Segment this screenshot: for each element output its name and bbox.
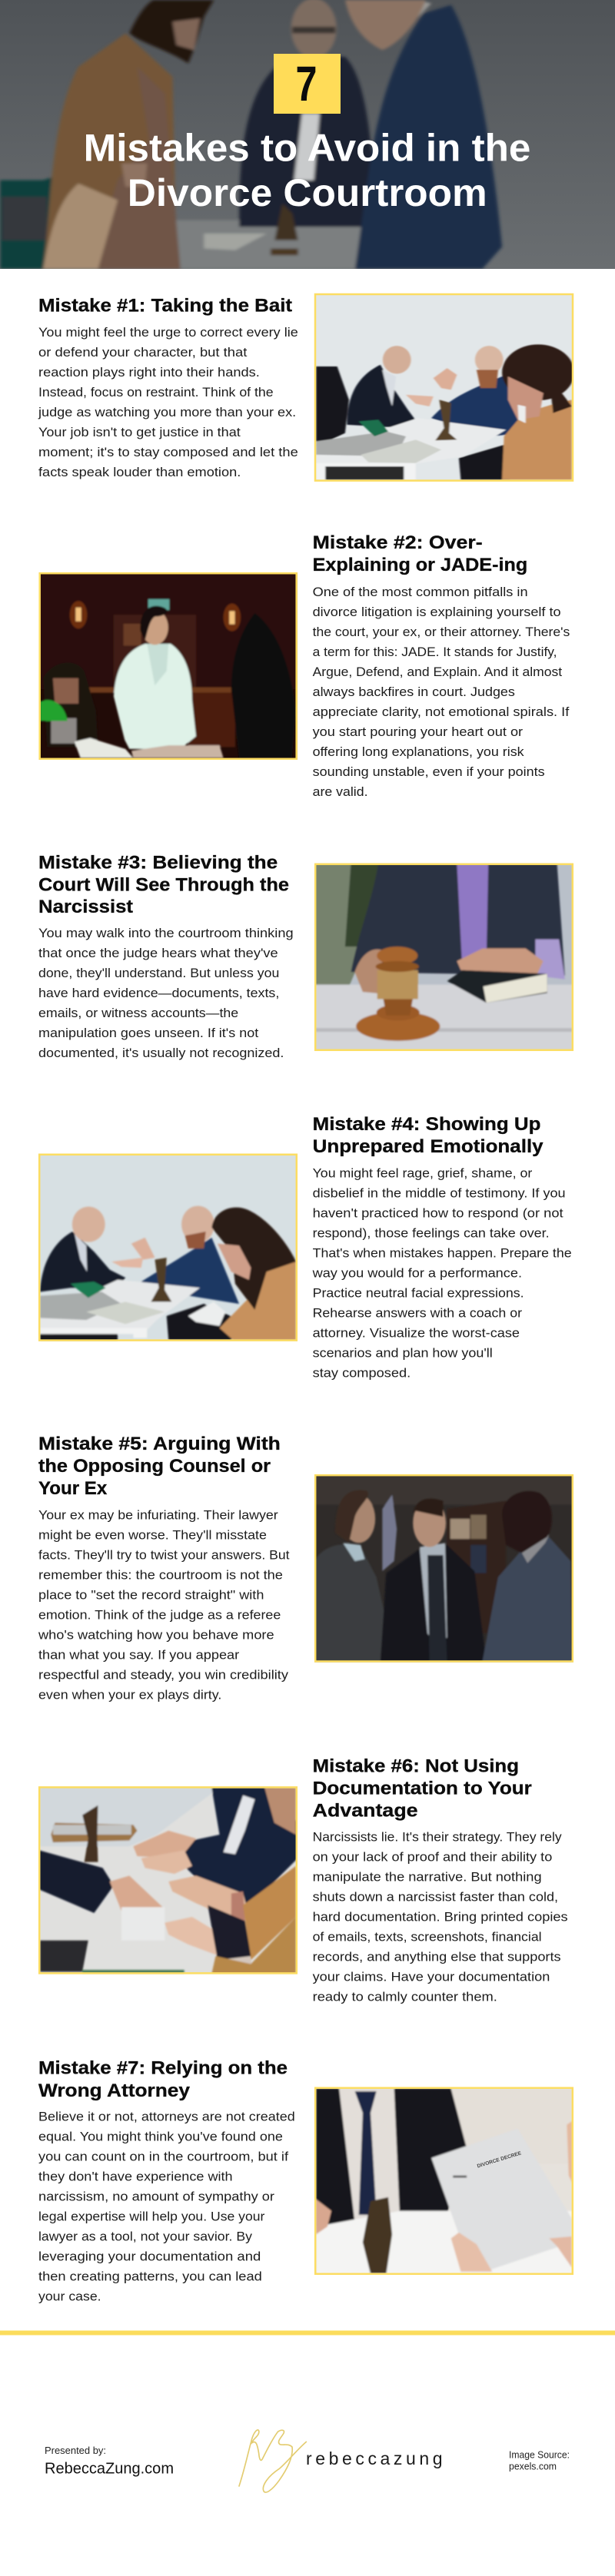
body text: then creating patterns, you can lead <box>38 2269 262 2283</box>
body text: Instead, focus on restraint. Think of the <box>38 385 274 399</box>
body text: who's watching how you behave more <box>38 1627 274 1643</box>
image source <box>509 2449 570 2472</box>
heading: Documentation to Your <box>313 1778 532 1799</box>
body text: respond), those feelings can take over. <box>313 1225 550 1240</box>
body text: are valid. <box>313 784 367 799</box>
body text: lawyer as a tool, not your savior. By <box>38 2229 253 2243</box>
heading: Mistake #7: Relying on the <box>38 2058 288 2079</box>
hero background photo <box>0 0 615 269</box>
heading: Unprepared Emotionally <box>313 1136 544 1157</box>
heading: Explaining or JADE-ing <box>313 555 527 575</box>
body text: shuts down a narcissist faster than cold, <box>313 1890 558 1905</box>
heading: Mistake #5: Arguing With <box>38 1434 281 1454</box>
body text: divorce litigation is explaining yourself to <box>313 605 561 619</box>
panel: mistake 7 <box>38 2058 573 2303</box>
heading: Mistake #6: Not Using <box>313 1755 519 1776</box>
body text: offering long explanations, you risk <box>313 744 524 759</box>
title: Mistakes to Avoid in the <box>84 126 530 169</box>
panel: hero header <box>0 0 615 269</box>
body text: your claims. Have your documentation <box>313 1970 550 1984</box>
body text <box>38 926 294 1060</box>
heading: the Opposing Counsel or <box>38 1456 271 1477</box>
heading: Mistake #3: Believing the <box>38 853 278 874</box>
body text: manipulate the narrative. But nothing <box>313 1870 542 1885</box>
panel: mistake 5 <box>38 1434 573 1702</box>
panel: mistake 2 <box>38 532 570 799</box>
presented by: RebeccaZung.com <box>45 2461 174 2478</box>
body text <box>38 325 298 479</box>
panel: footer <box>45 2430 570 2492</box>
heading: Your Ex <box>38 1478 108 1499</box>
body text: that once the judge hears what they've <box>38 946 278 960</box>
body text: than what you say. If you appear <box>38 1647 240 1663</box>
body text: reaction plays right into their hands. <box>38 365 260 380</box>
body text: Rehearse answers with a coach or <box>313 1305 522 1320</box>
photo frame <box>315 294 573 481</box>
photo frame <box>315 2088 573 2274</box>
body text: manipulation goes unseen. If it's not <box>38 1026 258 1040</box>
heading <box>38 853 289 917</box>
body text: or defend your character, but that <box>38 345 248 360</box>
body text: scenarios and plan how you'll <box>313 1345 493 1360</box>
divider <box>0 2331 615 2336</box>
heading <box>38 1434 281 1499</box>
photo: attorneys and upset woman at table <box>316 295 572 479</box>
body text: Argue, Defend, and Explain. And it almost <box>313 665 562 679</box>
body text: leveraging your documentation and <box>38 2249 261 2263</box>
photo: three attorneys talking <box>314 1476 573 1663</box>
heading <box>38 2058 288 2101</box>
photo frame <box>315 1475 573 1661</box>
panel: mistake 1 <box>38 293 574 482</box>
photo: attorney handing divorce decree <box>316 2088 572 2273</box>
photo: hands reviewing documents <box>40 1789 296 1974</box>
body text: emotion. Think of the judge as a referee <box>38 1607 281 1623</box>
photo: woman in white suit in courtroom <box>40 572 298 760</box>
body text: stay composed. <box>313 1365 411 1380</box>
number badge: 7 <box>295 56 317 111</box>
body text: you can count on in the courtroom, but if <box>38 2149 288 2163</box>
body text: You may walk into the courtroom thinking <box>38 926 294 940</box>
body text: records, and anything else that supports <box>313 1950 561 1964</box>
body text: disbelief in the middle of testimony. If you <box>313 1185 566 1200</box>
body text: sounding unstable, even if your points <box>313 764 545 779</box>
body text: judge as watching you more than your ex. <box>38 405 296 419</box>
body text: You might feel the urge to correct every lie <box>38 325 298 340</box>
body text: a term for this: JADE. It stands for Justify, <box>313 645 557 659</box>
heading <box>313 532 527 575</box>
presented by <box>45 2445 174 2478</box>
heading: Mistake #4: Showing Up <box>313 1114 541 1135</box>
body text: Narcissists lie. It's their strategy. They rely <box>313 1830 562 1845</box>
body text: remember this: the courtroom is not the <box>38 1567 283 1583</box>
body text: might be even worse. They'll misstate <box>38 1527 267 1543</box>
body text: Your ex may be infuriating. Their lawyer <box>38 1507 278 1523</box>
image source: pexels.com <box>509 2460 557 2472</box>
panel: mistake 3 <box>38 853 573 1060</box>
body text: respectful and steady, you win credibility <box>38 1667 289 1683</box>
body text <box>313 1830 568 2004</box>
panel: mistake 6 <box>38 1755 568 2004</box>
body text: they don't have experience with <box>38 2169 233 2183</box>
body text: done, they'll understand. But unless you <box>38 966 279 980</box>
body text <box>313 585 570 799</box>
body text: One of the most common pitfalls in <box>313 585 528 599</box>
number badge <box>274 54 341 114</box>
photo frame <box>39 1787 297 1973</box>
presented by: Presented by: <box>45 2445 106 2456</box>
body text: appreciate clarity, not emotional spirals. If <box>313 705 570 719</box>
body text: narcissism, no amount of sympathy or <box>38 2189 274 2203</box>
logo signature <box>238 2429 308 2493</box>
body text: your case. <box>38 2289 101 2303</box>
heading <box>313 1755 532 1821</box>
heading: Narcissist <box>38 897 133 917</box>
body text: Your job isn't to get justice in that <box>38 425 241 439</box>
body text <box>312 1165 572 1380</box>
body text: always backfires in court. Judges <box>313 685 515 699</box>
photo: attorneys and crying woman <box>40 1155 296 1341</box>
heading: Wrong Attorney <box>38 2080 191 2101</box>
body text: documented, it's usually not recognized. <box>38 1046 284 1060</box>
body text: facts speak louder than emotion. <box>38 465 241 479</box>
body text: ready to calmly counter them. <box>313 1990 497 2004</box>
title <box>84 126 530 214</box>
photo: judge with gavel and book <box>316 864 572 1049</box>
body text: have hard evidence—documents, texts, <box>38 986 279 1000</box>
photo frame <box>39 1155 297 1341</box>
body text: the court, your ex, or their attorney. There's <box>313 625 570 639</box>
heading: Mistake #1: Taking the Bait <box>38 295 292 317</box>
body text: facts. They'll try to twist your answers. But <box>38 1547 290 1563</box>
body text: equal. You might think you've found one <box>38 2129 283 2143</box>
panel: mistake 4 <box>38 1114 572 1380</box>
photo: attorney handing divorce decree: DIVORCE DECREE <box>477 2150 523 2170</box>
body text <box>38 2109 295 2303</box>
body text: You might feel rage, grief, shame, or <box>313 1165 533 1180</box>
body text: hard documentation. Bring printed copies <box>313 1910 568 1925</box>
body text: on your lack of proof and their ability to <box>313 1850 552 1865</box>
body text: That's when mistakes happen. Prepare the <box>313 1245 572 1260</box>
heading: Advantage <box>313 1801 418 1821</box>
body text: Practice neutral facial expressions. <box>313 1285 524 1300</box>
image source: Image Source: <box>509 2449 570 2461</box>
photo frame <box>40 573 297 759</box>
body text <box>38 1507 290 1702</box>
body text: moment; it's to stay composed and let the <box>38 445 298 459</box>
photo frame <box>315 864 573 1050</box>
logo wordmark: rebeccazung <box>306 2448 443 2468</box>
body text: way you would for a performance. <box>312 1265 522 1280</box>
body text: emails, or witness accounts—the <box>38 1006 238 1020</box>
body text: of emails, texts, screenshots, financial <box>313 1930 542 1944</box>
body text: you start pouring your heart out or <box>313 724 523 739</box>
body text: even when your ex plays dirty. <box>38 1687 221 1702</box>
body text: Believe it or not, attorneys are not created <box>38 2109 295 2123</box>
heading <box>313 1114 544 1157</box>
heading: Court Will See Through the <box>38 874 289 896</box>
heading: Mistake #2: Over- <box>313 532 483 553</box>
title: Divorce Courtroom <box>128 171 487 214</box>
body text: place to "set the record straight" with <box>38 1587 264 1603</box>
body text: legal expertise will help you. Use your <box>38 2209 265 2223</box>
logo <box>239 2430 443 2492</box>
body text: haven't practiced how to respond (or not <box>313 1205 563 1220</box>
body text: attorney. Visualize the worst-case <box>313 1325 520 1340</box>
